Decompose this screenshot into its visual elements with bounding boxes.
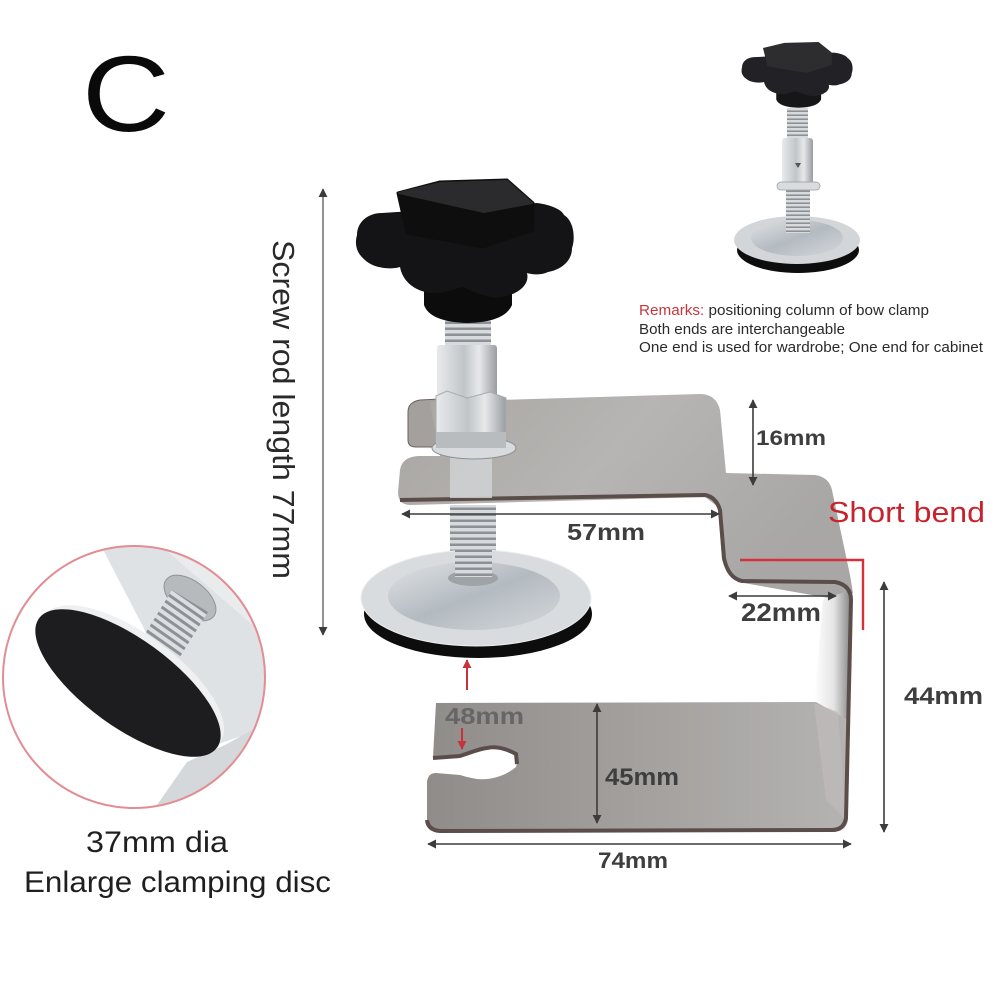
bolt thread [143,590,208,660]
dimension labels: 48mm [445,703,524,729]
red arrow: 48mm pointer [461,728,463,749]
remarks text block: Both ends are interchangeable [639,322,845,338]
dimension labels: 45mm [605,764,679,791]
dimension labels: 16mm [756,427,826,450]
dimension labels: 57mm [567,519,645,545]
bolt washer [164,574,216,622]
large positioning column [356,180,592,658]
dimension labels [445,427,983,873]
disc silver rim [50,606,224,742]
hex nut [436,391,506,447]
bracket: bent metal plate [398,394,853,832]
remarks text block: One end is used for wardrobe; One end for cabinet [639,340,983,356]
clamping disc [361,505,592,658]
disc black face [35,609,221,757]
dimension arrows [402,400,884,844]
label: short bend: Short bend [828,497,985,529]
dimension labels: 44mm [904,683,983,710]
magnified disc circle [2,545,266,809]
small disc [734,216,860,273]
remarks text block [639,303,983,356]
darker bevel at lower bend [814,703,846,820]
dimension labels: 74mm [598,848,668,873]
dark cut edge outline [400,495,851,831]
small collar and flange [777,138,820,190]
upper thread [445,320,491,350]
lower plate with slot [427,702,848,832]
collar [437,345,497,405]
red arrow: disc to plate [466,660,468,690]
knob [356,180,574,323]
slot cut edge [433,747,517,764]
small threaded rod [786,188,810,233]
vertical label: screw rod length: Screw rod length 77mm [266,240,301,579]
dimension labels: 22mm [741,599,821,627]
inner shiny wall [814,590,850,720]
caption: disc diameter [24,826,331,899]
lower thread [450,505,496,579]
title: variant letter C: C [82,33,170,154]
arrow: screw rod length [322,189,324,635]
lens ring [3,546,265,808]
small knob [742,42,853,108]
remarks text block: Remarks: positioning column of bow clamp [639,303,929,319]
rear tab of upper plate [408,399,440,447]
red bracket line: short bend [740,560,863,630]
nut flange [432,437,516,459]
small product photo: positioning column [734,42,860,273]
caption: disc diameter: 37mm dia [86,826,228,859]
metal background in lens [35,547,264,805]
upper plate with step [398,394,853,600]
lower reflection of column in plate [450,458,492,498]
caption: disc diameter: Enlarge clamping disc [24,866,331,899]
